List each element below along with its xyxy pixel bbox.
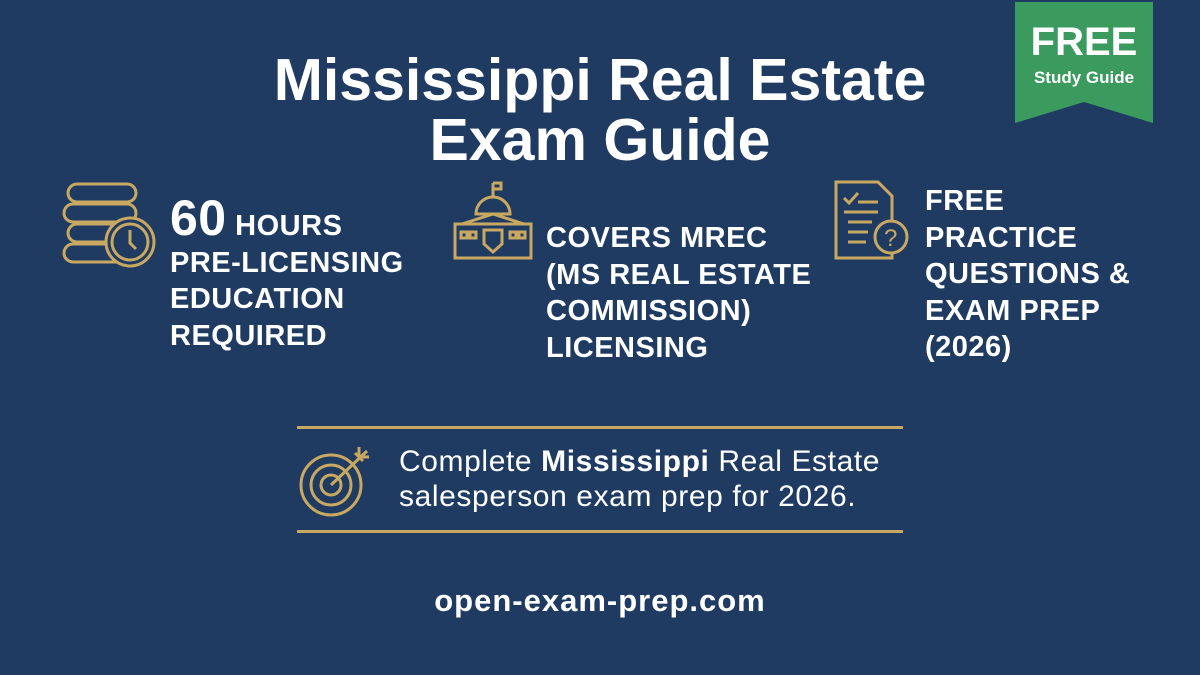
url footer: open-exam-prep.com xyxy=(434,583,766,618)
badge: free study guide xyxy=(1015,2,1153,123)
icon: checklist with question: ? xyxy=(884,225,897,252)
column 1 text xyxy=(170,190,404,352)
column 2 text: COVERS MREC xyxy=(546,222,767,254)
column 1 text: 60 HOURS xyxy=(170,190,342,246)
column 1 text: EDUCATION xyxy=(170,283,345,315)
callout text: Complete Mississippi Real Estate xyxy=(399,445,880,478)
title xyxy=(274,47,926,173)
column 1 text: REQUIRED xyxy=(170,320,327,352)
column 2 text: (MS REAL ESTATE xyxy=(546,258,811,290)
column 3 text: QUESTIONS & xyxy=(925,258,1130,290)
column 3 text xyxy=(925,185,1130,363)
column 3 text: EXAM PREP xyxy=(925,294,1100,326)
icon: capitol building xyxy=(454,182,532,260)
badge: free study guide: Study Guide xyxy=(1034,68,1134,87)
column 2 text: COMMISSION) xyxy=(546,295,751,327)
column 2 text xyxy=(546,222,811,364)
title: Mississippi Real Estate xyxy=(274,47,926,113)
column 2 text: LICENSING xyxy=(546,332,708,364)
icon: checklist with question xyxy=(834,180,908,260)
callout box xyxy=(297,426,903,533)
column 3 text: PRACTICE xyxy=(925,222,1077,254)
callout text xyxy=(399,445,880,513)
badge: free study guide: FREE xyxy=(1031,20,1137,64)
icon: books and clock xyxy=(62,182,156,268)
column 1 text: PRE-LICENSING xyxy=(170,246,404,278)
title: Exam Guide xyxy=(429,107,770,173)
column 3 text: (2026) xyxy=(925,331,1012,363)
icon: target xyxy=(300,447,369,516)
callout text: salesperson exam prep for 2026. xyxy=(399,480,856,513)
column 3 text: FREE xyxy=(925,185,1004,217)
